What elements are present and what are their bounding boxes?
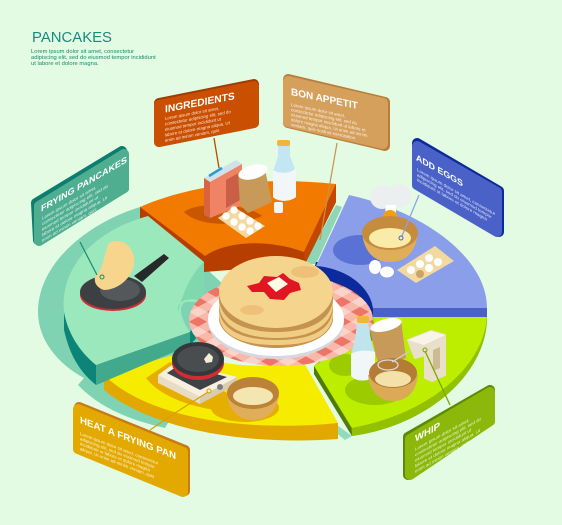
segment: frying pancakes xyxy=(64,216,204,385)
card: whip: labore et dolore magna aliqua. Ut xyxy=(415,428,481,469)
card: bon appetit: Lorem ipsum dolor sit amet, xyxy=(291,102,345,118)
card: frying pancakes: Lorem ipsum dolor sit amet, xyxy=(42,185,96,222)
card: frying pancakes: FRYING PANCAKES xyxy=(41,154,127,215)
card: bon appetit xyxy=(288,79,385,240)
connector xyxy=(320,143,337,240)
icon: frying pan with pancake xyxy=(80,241,169,311)
card: frying pancakes: enim ad minim veniam, quis xyxy=(42,206,97,244)
connector xyxy=(214,138,219,168)
segment: add eggs xyxy=(300,195,487,322)
card: ingredients: consectetur adipiscing elit, sed do xyxy=(165,109,231,126)
card: add eggs xyxy=(399,143,499,240)
card: ingredients xyxy=(159,84,254,168)
connector xyxy=(402,195,419,236)
jam and butter xyxy=(247,273,301,300)
shadow on segment xyxy=(184,205,262,224)
icon: egg tray xyxy=(218,206,265,238)
card: whip: enim ad minim veniam, quis xyxy=(415,439,470,475)
icon: batter bowl xyxy=(227,377,279,420)
pancake stack xyxy=(219,256,333,348)
card: ingredients: labore et dolore magna aliqua. Ut xyxy=(165,120,231,137)
intro text xyxy=(31,49,156,67)
card: frying pancakes xyxy=(36,151,127,279)
card: add eggs: ADD EGGS xyxy=(416,153,463,189)
card: ingredients: eiusmod tempor incididunt ut xyxy=(165,116,222,132)
card: ingredients: enim ad minim veniam, quis xyxy=(165,128,220,143)
icon: egg bowl xyxy=(362,216,418,262)
icon: hand mixer xyxy=(408,331,445,381)
card: heat a frying pan: HEAT A FRYING PAN xyxy=(80,415,176,462)
card: heat a frying pan: Lorem ipsum dolor sit amet, consectetur xyxy=(80,431,159,466)
card: whip: eiusmod tempor incididunt ut xyxy=(415,427,472,464)
icon: eggs xyxy=(369,260,394,278)
shadow under bowl xyxy=(345,375,405,405)
connector xyxy=(80,242,97,275)
card: bon appetit: consectetur adipiscing elit, sed do xyxy=(291,107,357,126)
card: whip: consectetur adipiscing elit, sed do xyxy=(415,416,481,458)
card: add eggs: incididunt ut labore et dolore magna xyxy=(417,177,487,223)
shadow under stove and bowl xyxy=(146,362,240,412)
base ring xyxy=(38,207,240,428)
base under green segment xyxy=(330,420,352,440)
card: heat a frying pan xyxy=(78,389,211,492)
icon: whip milk bottle xyxy=(351,316,375,380)
intro text: adipiscing elit, sed do eiusmod tempor incididunt xyxy=(31,55,156,61)
card: ingredients: Lorem ipsum dolor sit amet, xyxy=(165,106,219,121)
card: bon appetit: eiusmod tempor incididunt ut labore et xyxy=(291,112,366,133)
segment: whip xyxy=(314,317,487,436)
icon: milk bottle xyxy=(273,140,296,213)
intro text: ut labore et dolore magna. xyxy=(31,61,99,67)
icon: whisk bowl xyxy=(368,351,418,401)
card: heat a frying pan: adipiscing elit, sed do eiusmod tempor xyxy=(80,436,155,470)
icon: flour bag xyxy=(237,161,272,213)
icon: book xyxy=(204,160,242,218)
intro text: Lorem ipsum dolor sit amet, consectetur xyxy=(31,49,134,55)
card: heat a frying pan: incididunt ut labore et dolore magna xyxy=(80,441,150,473)
checkered cloth xyxy=(189,274,373,366)
card: whip xyxy=(408,348,490,475)
card: whip: WHIP xyxy=(415,421,440,445)
card: frying pancakes: eiusmod tempor incididunt ut xyxy=(42,194,99,233)
card: add eggs: Lorem ipsum dolor sit amet, consectetur xyxy=(417,167,495,218)
icon: egg carton xyxy=(397,246,454,283)
segment: ingredients xyxy=(140,181,336,272)
card: bon appetit: veniam, quis nostrud exercitation xyxy=(291,122,356,141)
card: add eggs: adipiscing elit, sed do eiusmod tempor xyxy=(417,172,492,221)
card: heat a frying pan: aliqua. Ut enim ad minim veniam, quis xyxy=(80,446,155,479)
title: PANCAKES xyxy=(32,30,112,46)
card: bon appetit: dolore magna aliqua. Ut enim ad minim xyxy=(291,117,368,138)
icon: whip flour bag xyxy=(369,315,406,368)
card: ingredients: INGREDIENTS xyxy=(165,91,235,115)
connector xyxy=(150,392,208,430)
card: frying pancakes: labore et dolore magna aliqua. Ut xyxy=(42,195,108,238)
plate xyxy=(208,282,344,359)
card: whip: Lorem ipsum dolor sit amet, xyxy=(415,417,469,453)
icon: cracked egg xyxy=(370,184,411,222)
icon: stove with pan xyxy=(158,342,237,404)
connector xyxy=(425,351,450,405)
card: bon appetit: BON APPETIT xyxy=(291,87,359,112)
card: frying pancakes: consectetur adipiscing elit, sed do xyxy=(42,183,108,227)
shadow under bowl xyxy=(333,235,387,265)
base seam xyxy=(304,205,342,264)
segment: heat a frying pan xyxy=(104,350,338,440)
